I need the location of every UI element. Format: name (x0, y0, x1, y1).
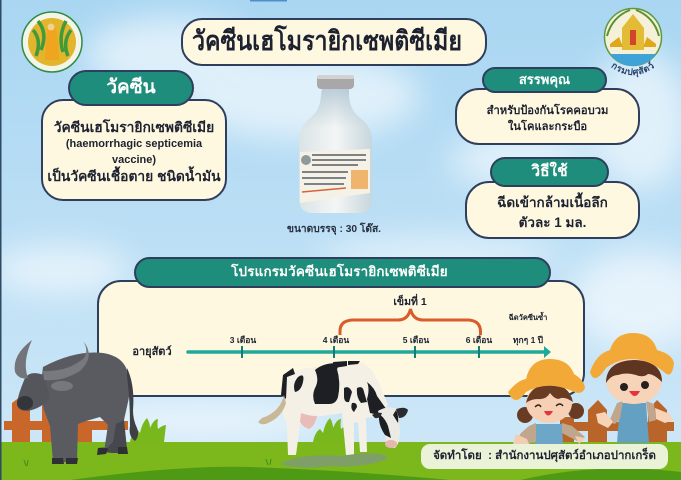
heading: vaccine (68, 70, 194, 106)
label: every year: ทุกๆ 1 ปี (513, 335, 543, 345)
label: 3 months: 3 เดือน (230, 335, 256, 345)
panel: benefits (455, 88, 640, 145)
heading: how to use: วิธีใช้ (531, 163, 568, 180)
label: repeat shot: ฉีดวัคซีนซ้ำ (509, 313, 547, 322)
logo: department of livestock emblem: กรมปศุสัตว์ (611, 60, 654, 78)
panel: vaccine (41, 99, 227, 201)
heading: how to use (490, 157, 609, 187)
heading: benefits (482, 67, 607, 93)
footer credit: จัดทำโดย : สำนักงานปศุสัตว์อำเภอปากเกร็ด (433, 450, 656, 462)
label: 4 months: 4 เดือน (323, 335, 349, 345)
panel: benefits: สำหรับป้องกันโรคคอบวม (487, 105, 608, 117)
label: dose 1: เข็มที่ 1 (393, 296, 427, 308)
heading: benefits: สรรพคุณ (519, 72, 570, 87)
heading: vaccine: วัคซีน (106, 77, 156, 98)
panel: vaccine: (haemorrhagic septicemia vaccine) (66, 138, 202, 166)
panel: how to use (465, 181, 640, 239)
bottle caption: ขนาดบรรจุ : 30 โด๊ส. (287, 224, 381, 235)
label: animal age: อายุสัตว์ (132, 346, 172, 358)
panel: vaccine: เป็นวัคซีนเชื้อตาย ชนิดน้ำมัน (47, 169, 221, 184)
title (181, 18, 487, 66)
panel: vaccine: วัคซีนเฮโมรายิกเซพติซีเมีย (54, 120, 214, 135)
panel: how to use: ตัวละ 1 มล. (519, 215, 586, 230)
footer credit (421, 444, 668, 469)
heading: vaccination programme (134, 257, 551, 288)
label: 5 months: 5 เดือน (403, 335, 429, 345)
axis arrow with ticks and brace (186, 308, 551, 358)
title: วัคซีนเฮโมรายิกเซพติซีเมีย (192, 26, 462, 56)
panel: vaccination programme (97, 280, 585, 397)
label: 6 months: 6 เดือน (466, 335, 492, 345)
timeline chart (132, 294, 551, 358)
panel: benefits: ในโคและกระบือ (508, 120, 587, 132)
heading: vaccination programme: โปรแกรมวัคซีนเฮโมรายิกเซพติซีเมีย (231, 264, 448, 279)
panel: how to use: ฉีดเข้ากล้ามเนื้อลึก (497, 195, 608, 210)
